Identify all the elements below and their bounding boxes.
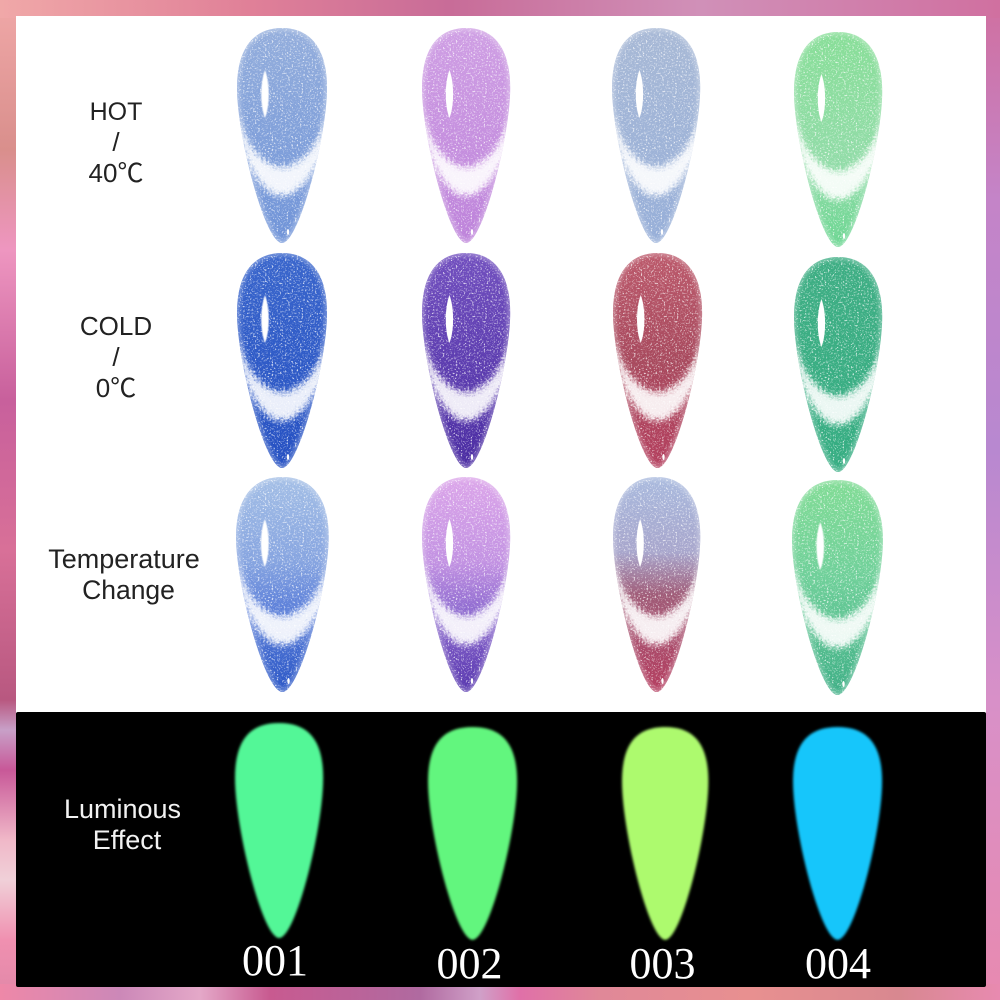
nail: cold 001 <box>235 253 329 468</box>
nail: change 003 <box>611 477 702 692</box>
label: hot <box>89 98 143 188</box>
nail: glow 001 <box>235 723 323 938</box>
label: luminous effect: Luminous <box>64 794 181 824</box>
number: 002: 002 <box>436 939 502 988</box>
nail: hot 004 <box>792 32 884 247</box>
label: temperature change: Change <box>82 575 175 605</box>
nail: change 004 <box>790 480 885 695</box>
label: luminous effect: Effect <box>93 825 162 855</box>
nail: cold 003 <box>611 253 704 468</box>
nail: cold 002 <box>420 253 512 468</box>
label: hot: / <box>112 127 120 157</box>
number: 003: 003 <box>630 939 696 988</box>
number: 004: 004 <box>805 939 871 988</box>
label: cold: 0℃ <box>96 373 136 403</box>
number: 001: 001 <box>242 936 308 985</box>
nail: change 001 <box>234 477 331 692</box>
nail: change 002 <box>420 477 512 692</box>
nail: hot 003 <box>610 28 702 243</box>
panel: white comparison area <box>16 16 986 713</box>
label: cold: / <box>112 342 120 372</box>
nail: cold 004 <box>792 257 884 472</box>
label: luminous effect <box>64 794 181 855</box>
nail: hot 002 <box>420 28 512 243</box>
label: cold <box>80 311 152 403</box>
label: temperature change <box>48 544 200 605</box>
label: hot: 40℃ <box>89 158 143 188</box>
label: temperature change: Temperature <box>48 544 200 574</box>
label: hot: HOT <box>90 98 142 126</box>
label: cold: COLD <box>80 311 152 341</box>
nail: glow 002 <box>428 727 517 940</box>
nail: glow 004 <box>793 727 882 940</box>
nail: hot 001 <box>235 28 329 243</box>
panel: luminous effect <box>16 712 986 988</box>
nail: glow 003 <box>622 727 708 940</box>
